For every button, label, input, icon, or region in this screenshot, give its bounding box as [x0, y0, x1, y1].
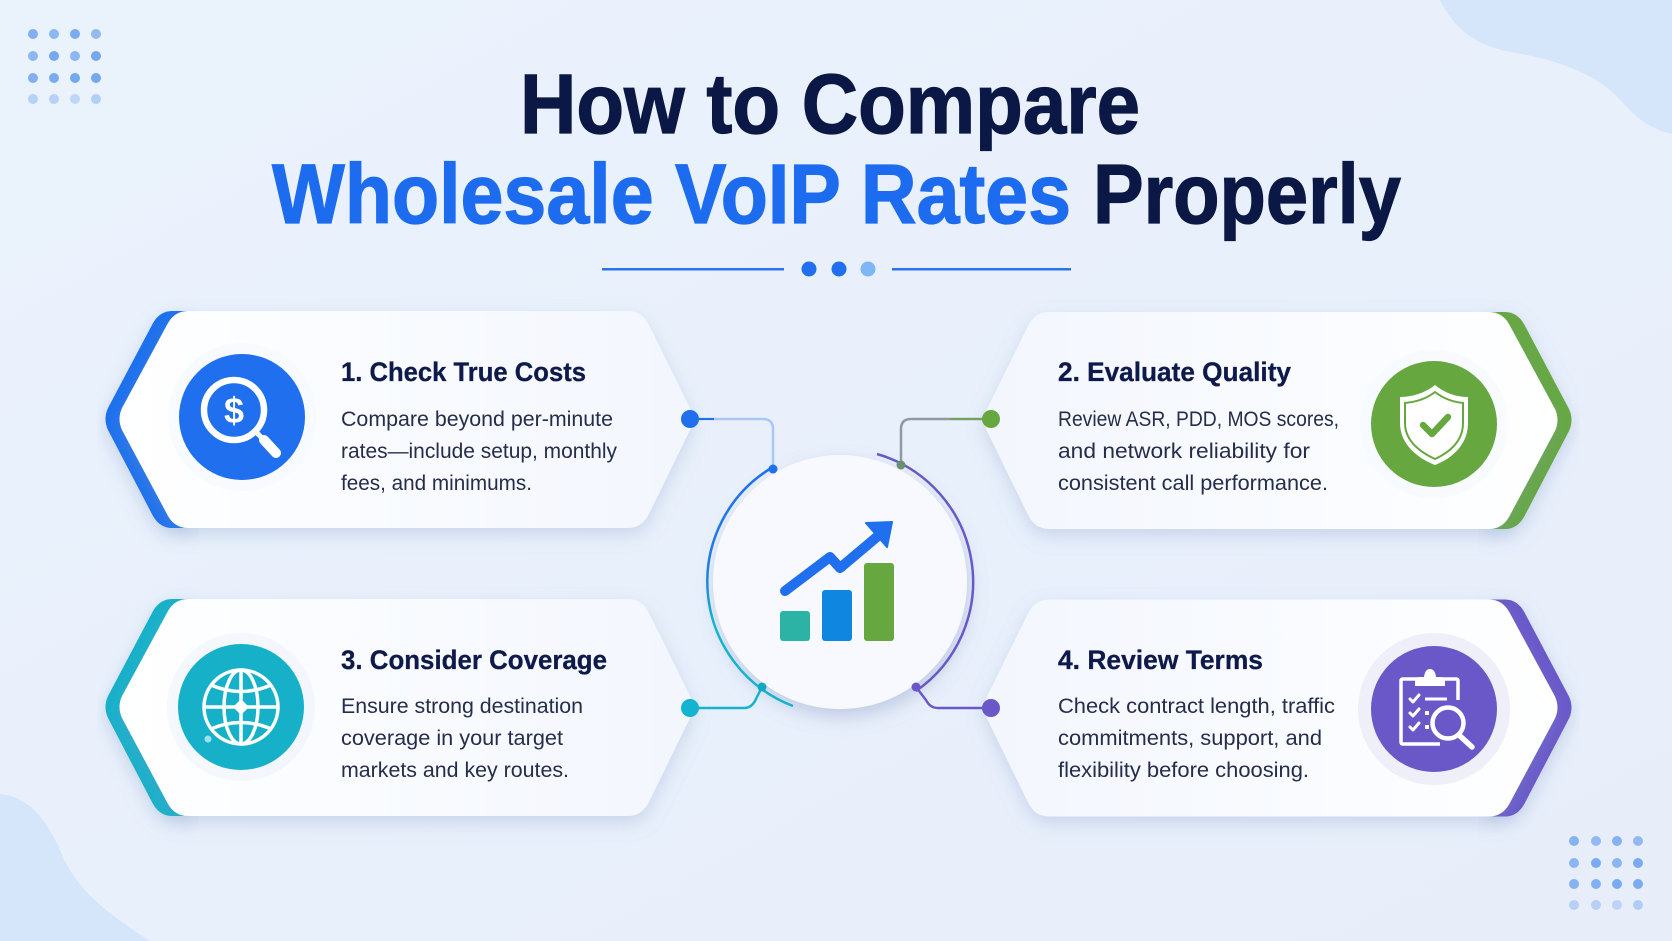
title divider — [602, 262, 1071, 276]
connector: card 4 to hub — [912, 682, 1000, 717]
card accent: blue — [106, 311, 190, 528]
decorative blob bottom left — [0, 794, 150, 941]
dot grid bottom right — [1569, 836, 1643, 910]
body text — [341, 695, 583, 782]
body text: and network reliability for — [1058, 440, 1310, 463]
body text: flexibility before choosing. — [1058, 759, 1309, 782]
icon: growth chart — [780, 522, 894, 641]
card body — [984, 312, 1558, 529]
body text: consistent call performance. — [1058, 472, 1328, 495]
title — [272, 57, 1401, 241]
icon: globe — [167, 633, 315, 781]
heading: 2. Evaluate Quality — [1058, 357, 1291, 387]
heading: 4. Review Terms — [1058, 645, 1263, 675]
body text: Compare beyond per-minute — [341, 408, 613, 431]
arc: blue and teal left — [707, 467, 793, 706]
body text: Ensure strong destination — [341, 695, 583, 718]
panel: 1 check true costs — [106, 311, 692, 528]
panel: 3 consider coverage — [106, 599, 692, 816]
dot grid top left — [28, 29, 101, 104]
title: Wholesale VoIP Rates — [272, 147, 1071, 241]
card accent: teal — [106, 599, 190, 816]
body text: rates—include setup, monthly — [341, 440, 617, 463]
card body — [120, 311, 692, 528]
icon: clipboard with magnifier — [1358, 633, 1510, 785]
panel: 2 evaluate quality — [984, 312, 1572, 529]
body text: Check contract length, traffic — [1058, 695, 1335, 718]
title: Properly — [1093, 147, 1401, 241]
card accent: purple — [1487, 600, 1572, 816]
icon: magnifier with dollar — [168, 343, 316, 491]
icon: shield check — [1360, 350, 1508, 498]
decorative blob top right — [1440, 0, 1672, 134]
center hub circle — [707, 454, 973, 709]
body text: Review ASR, PDD, MOS scores, — [1058, 408, 1339, 431]
connector: card 3 to hub — [681, 682, 766, 717]
body text: fees, and minimums. — [341, 472, 532, 495]
connector: card 1 to hub — [681, 410, 778, 474]
body text: markets and key routes. — [341, 759, 569, 782]
heading: 3. Consider Coverage — [341, 645, 607, 675]
title: How to Compare — [520, 57, 1140, 151]
panel: 4 review terms — [984, 600, 1572, 816]
body text — [341, 408, 617, 495]
heading: 1. Check True Costs — [341, 357, 586, 387]
connector: card 2 to hub — [896, 410, 1000, 470]
card body — [120, 599, 692, 816]
card body — [984, 600, 1558, 816]
body text: coverage in your target — [341, 727, 563, 750]
body text: commitments, support, and — [1058, 727, 1322, 750]
card accent: green — [1487, 312, 1572, 529]
body text — [1058, 695, 1335, 782]
body text — [1058, 408, 1339, 495]
icon: magnifier with dollar: $ — [224, 390, 244, 431]
arc: purple right — [877, 454, 973, 691]
